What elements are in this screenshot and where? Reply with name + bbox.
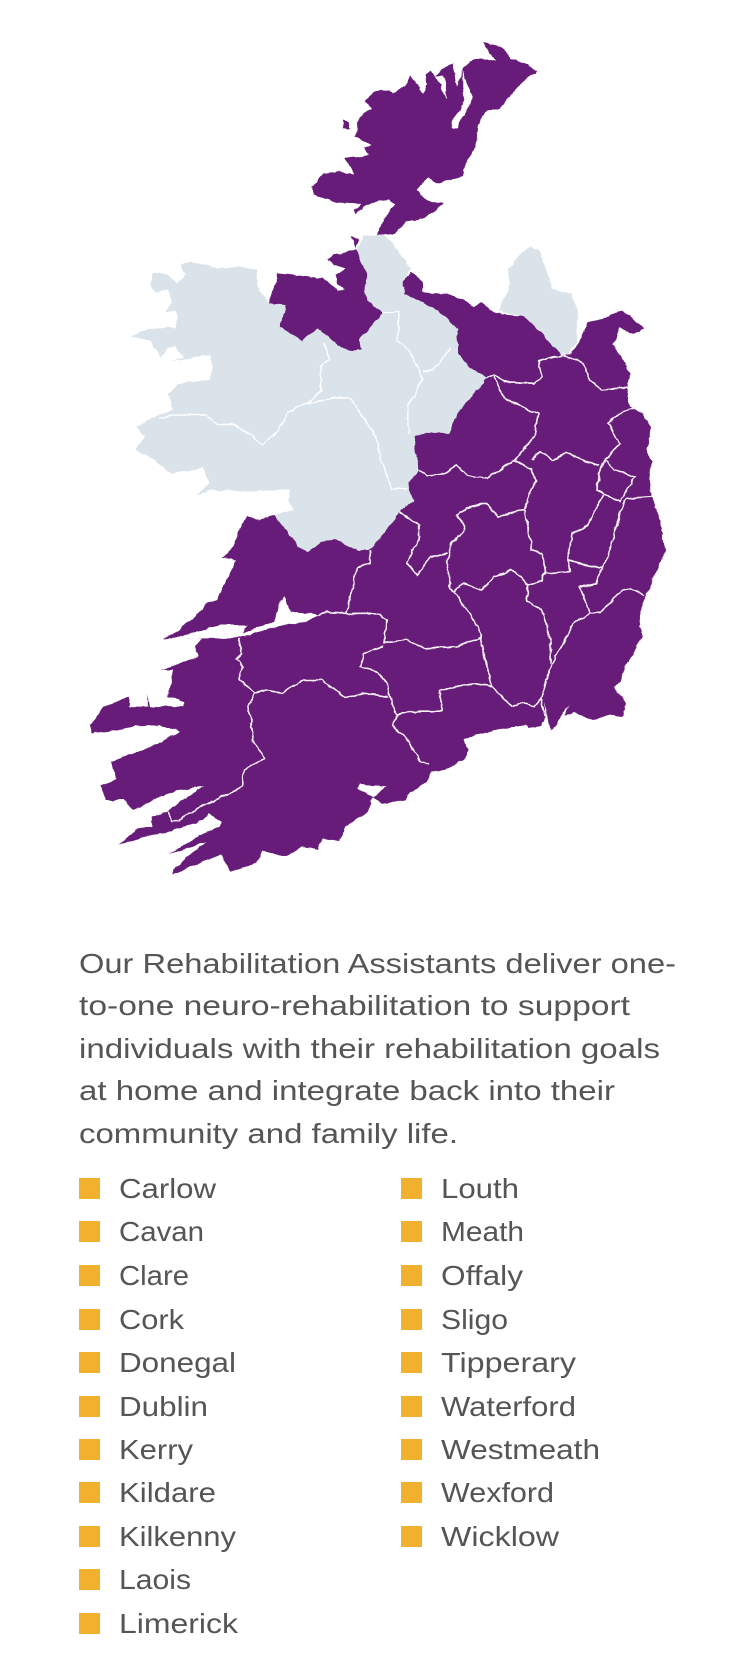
county list: left column: Kilkenny xyxy=(119,1521,236,1552)
region: grey Northern Ireland portion xyxy=(498,247,578,354)
description paragraph: individuals with their rehabilitation goals xyxy=(79,1033,660,1064)
county list: right column: Wexford xyxy=(441,1477,554,1508)
region: Sligo xyxy=(268,237,383,350)
county list: right column: Louth xyxy=(441,1173,519,1204)
region: purple counties with service (east and south) xyxy=(90,272,665,875)
description paragraph: Our Rehabilitation Assistants deliver one- xyxy=(79,948,676,979)
county list: right column: Sligo xyxy=(441,1304,508,1335)
county list: right column: Tipperary xyxy=(441,1347,576,1378)
description paragraph: at home and integrate back into their xyxy=(79,1075,615,1106)
region: Shannon estuary xyxy=(164,597,318,640)
county list: right column: Westmeath xyxy=(441,1434,600,1465)
region: grey counties without service (west) xyxy=(131,235,487,552)
region: purple county borders xyxy=(168,355,651,822)
county list: left column: Carlow xyxy=(119,1173,217,1204)
county list: left column: Kerry xyxy=(119,1434,193,1465)
county list: right column: Offaly xyxy=(441,1260,523,1291)
county list: right column: Waterford xyxy=(441,1391,576,1422)
map of Ireland by county xyxy=(90,42,665,875)
county list: left column: Limerick xyxy=(119,1608,239,1639)
region: Donegal xyxy=(312,42,536,235)
county list: left column: Clare xyxy=(119,1260,189,1291)
county list: left column: Kildare xyxy=(119,1477,216,1508)
county list: left column xyxy=(79,1173,239,1639)
county list: right column xyxy=(401,1173,600,1552)
county list: left column: Cavan xyxy=(119,1216,204,1247)
description paragraph: community and family life. xyxy=(79,1118,458,1149)
county list: right column: Meath xyxy=(441,1216,524,1247)
region: grey county borders xyxy=(159,312,451,489)
description paragraph: to-one neuro-rehabilitation to support xyxy=(79,990,630,1021)
county list: left column: Cork xyxy=(119,1304,185,1335)
county list: right column: Wicklow xyxy=(441,1521,560,1552)
county list: left column: Laois xyxy=(119,1564,191,1595)
county list: left column: Dublin xyxy=(119,1391,208,1422)
county list: left column: Donegal xyxy=(119,1347,236,1378)
description paragraph xyxy=(79,948,676,1149)
